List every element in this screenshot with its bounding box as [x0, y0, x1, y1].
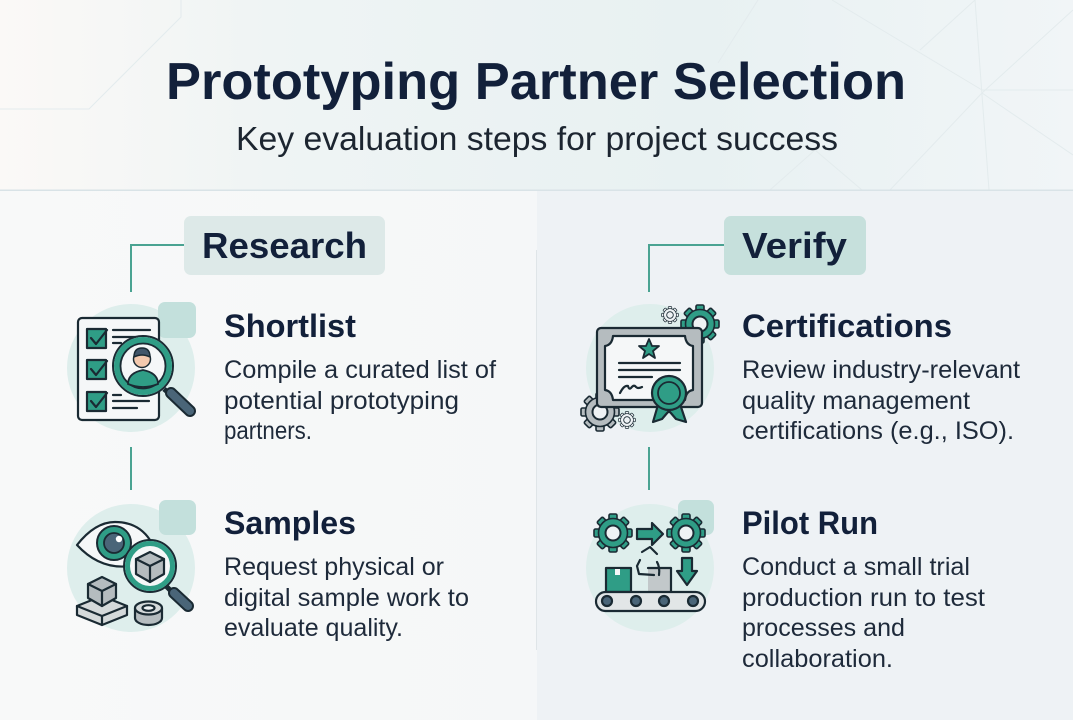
icon: certificate with ribbon and gears [581, 304, 719, 432]
text: Certifications: Certifications [742, 308, 952, 344]
text: Samples [224, 505, 469, 642]
header band [0, 0, 1073, 191]
badge: Verify: Verify [742, 225, 847, 266]
badge: Research [184, 216, 385, 275]
text: Pilot Run: collaboration. [742, 645, 893, 673]
panel: right background [537, 190, 1073, 720]
text: Shortlist: partners. [224, 417, 312, 445]
badge: Verify [724, 216, 866, 275]
subtitle: Key evaluation steps for project success [236, 120, 838, 157]
icon: eye, magnifier and samples [67, 500, 196, 632]
text: Samples: Samples [224, 505, 356, 541]
text: Pilot Run: Pilot Run [742, 505, 878, 541]
text: Shortlist: potential prototyping [224, 387, 459, 415]
column: Research [67, 216, 496, 642]
text: Pilot Run: production run to test [742, 584, 985, 612]
connector: Research heading to Shortlist [131, 245, 184, 292]
text: Shortlist [224, 308, 496, 445]
text: Pilot Run: Conduct a small trial [742, 553, 970, 581]
title: Prototyping Partner Selection [166, 53, 906, 111]
badge: Research: Research [202, 225, 367, 266]
text: Pilot Run [742, 505, 985, 673]
text: Samples: evaluate quality. [224, 614, 403, 642]
icon: production line [586, 500, 714, 632]
text: Certifications: quality management [742, 387, 970, 415]
column: Verify [581, 216, 1020, 673]
panel: left background [0, 190, 537, 720]
text: Certifications: Review industry-relevant [742, 356, 1020, 384]
connector: Verify heading to Certifications [649, 245, 724, 292]
connector: Shortlist to Samples [130, 447, 132, 490]
text: Samples: digital sample work to [224, 584, 469, 612]
text: Samples: Request physical or [224, 553, 444, 581]
text: Certifications [742, 308, 1020, 445]
text: Pilot Run: processes and [742, 614, 905, 642]
text: Certifications: certifications (e.g., ISO). [742, 417, 1014, 445]
icon: checklist with magnifier [67, 302, 196, 432]
text: Shortlist: Compile a curated list of [224, 356, 496, 384]
text: Shortlist: Shortlist [224, 308, 356, 344]
divider: between columns [536, 250, 538, 650]
connector: Certifications to Pilot Run [648, 447, 650, 490]
